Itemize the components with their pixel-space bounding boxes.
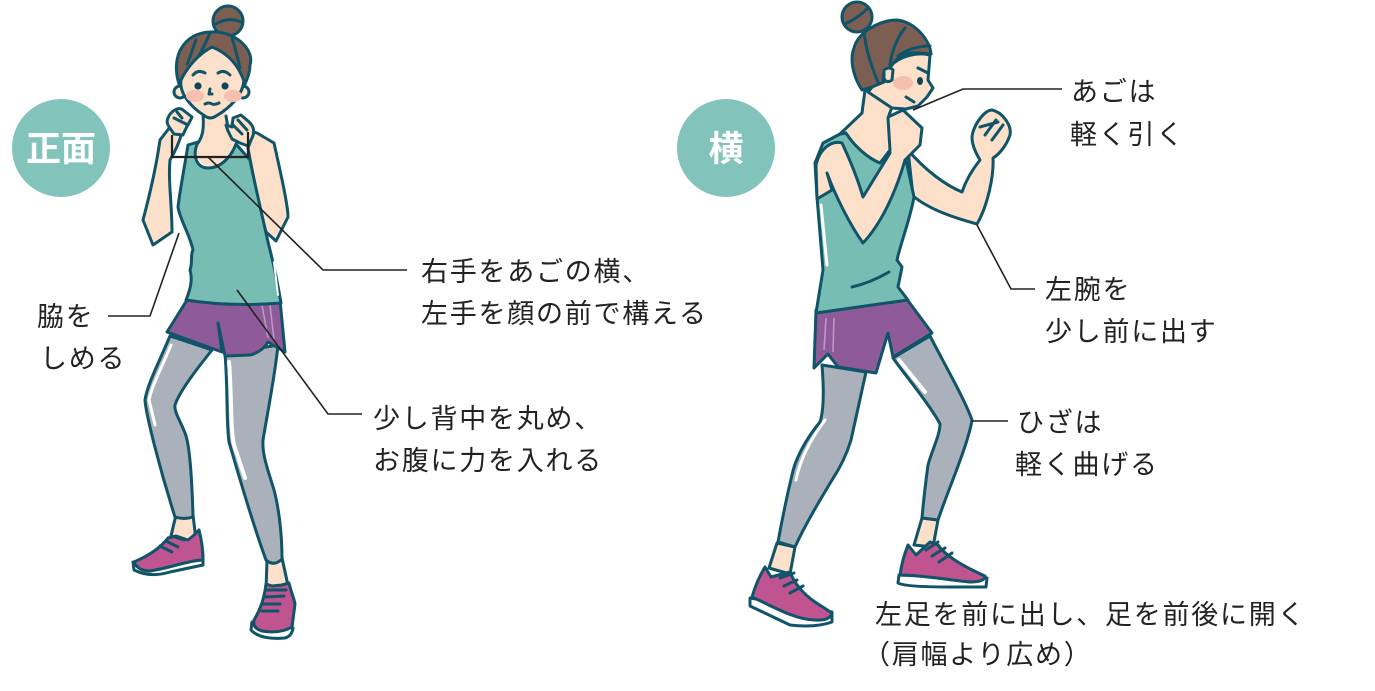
text: hand position	[421, 257, 708, 329]
text: knee: 軽く曲げる	[1015, 450, 1159, 480]
badge: front view	[12, 99, 110, 197]
left fist	[167, 109, 192, 135]
neck	[840, 90, 893, 163]
cheeks	[186, 90, 242, 102]
text: knee	[1015, 408, 1159, 480]
shorts	[814, 298, 932, 373]
right shoe	[251, 583, 295, 638]
left leg	[145, 336, 212, 540]
badge: front view: 正面	[26, 130, 96, 169]
badge: side view	[677, 99, 775, 197]
tank top	[178, 142, 281, 304]
leader line: chin	[913, 89, 1062, 110]
text: feet	[863, 600, 1306, 670]
front leg ankle	[914, 518, 938, 547]
rear leg ankle	[769, 543, 795, 574]
text: back and belly: お腹に力を入れる	[373, 446, 603, 476]
hair	[852, 20, 931, 90]
text: feet: 左足を前に出し、足を前後に開く	[875, 600, 1306, 630]
rear shoe	[750, 567, 832, 626]
text: chin	[1070, 77, 1185, 150]
text: armpit	[37, 302, 126, 374]
leader line: left arm	[977, 225, 1035, 289]
eyes and mouth	[193, 71, 230, 104]
front shoe	[898, 542, 987, 587]
text: hand position: 左手を顔の前で構える	[421, 299, 708, 329]
text: hand position: 右手をあごの横、	[421, 257, 651, 287]
rear leg	[778, 365, 866, 547]
right arm	[248, 132, 288, 241]
leader line: hands position	[208, 157, 407, 270]
eye and mouth	[906, 68, 928, 102]
leader line: belly	[237, 290, 362, 414]
front leg	[893, 336, 972, 520]
neck	[190, 112, 240, 172]
ears	[174, 86, 249, 98]
ear	[884, 68, 893, 82]
left arm	[143, 127, 182, 245]
right leg	[225, 345, 289, 590]
text: left arm: 左腕を	[1045, 275, 1131, 305]
illustration: woman front view	[133, 6, 295, 638]
hair bun	[842, 2, 872, 32]
leader line: fists bracket to text	[172, 132, 248, 157]
face	[181, 46, 244, 118]
text: left arm: 少し前に出す	[1045, 317, 1218, 347]
cheek	[893, 76, 913, 90]
leader line: knee	[972, 420, 1008, 422]
hair	[176, 32, 251, 84]
hair bun	[213, 6, 243, 36]
face	[868, 54, 933, 109]
shorts	[167, 300, 285, 356]
right fist	[226, 115, 254, 146]
text: armpit: しめる	[40, 344, 126, 374]
text: knee: ひざは	[1017, 408, 1103, 438]
text: armpit: 脇を	[37, 302, 94, 332]
text: back and belly	[373, 404, 603, 476]
left shoe	[133, 530, 203, 575]
tank top	[815, 133, 914, 313]
text: back and belly: 少し背中を丸め、	[373, 404, 603, 434]
leader line: armpit	[108, 233, 179, 316]
badge: side view: 横	[708, 130, 744, 169]
text: feet: （肩幅より広め）	[863, 640, 1092, 670]
arm, shoulder and forearm	[816, 110, 922, 243]
far arm	[908, 110, 1010, 224]
text: chin: 軽く引く	[1070, 120, 1185, 150]
illustration: woman side view	[750, 2, 1010, 626]
text: left arm	[1045, 275, 1218, 347]
text: chin: あごは	[1071, 77, 1157, 107]
